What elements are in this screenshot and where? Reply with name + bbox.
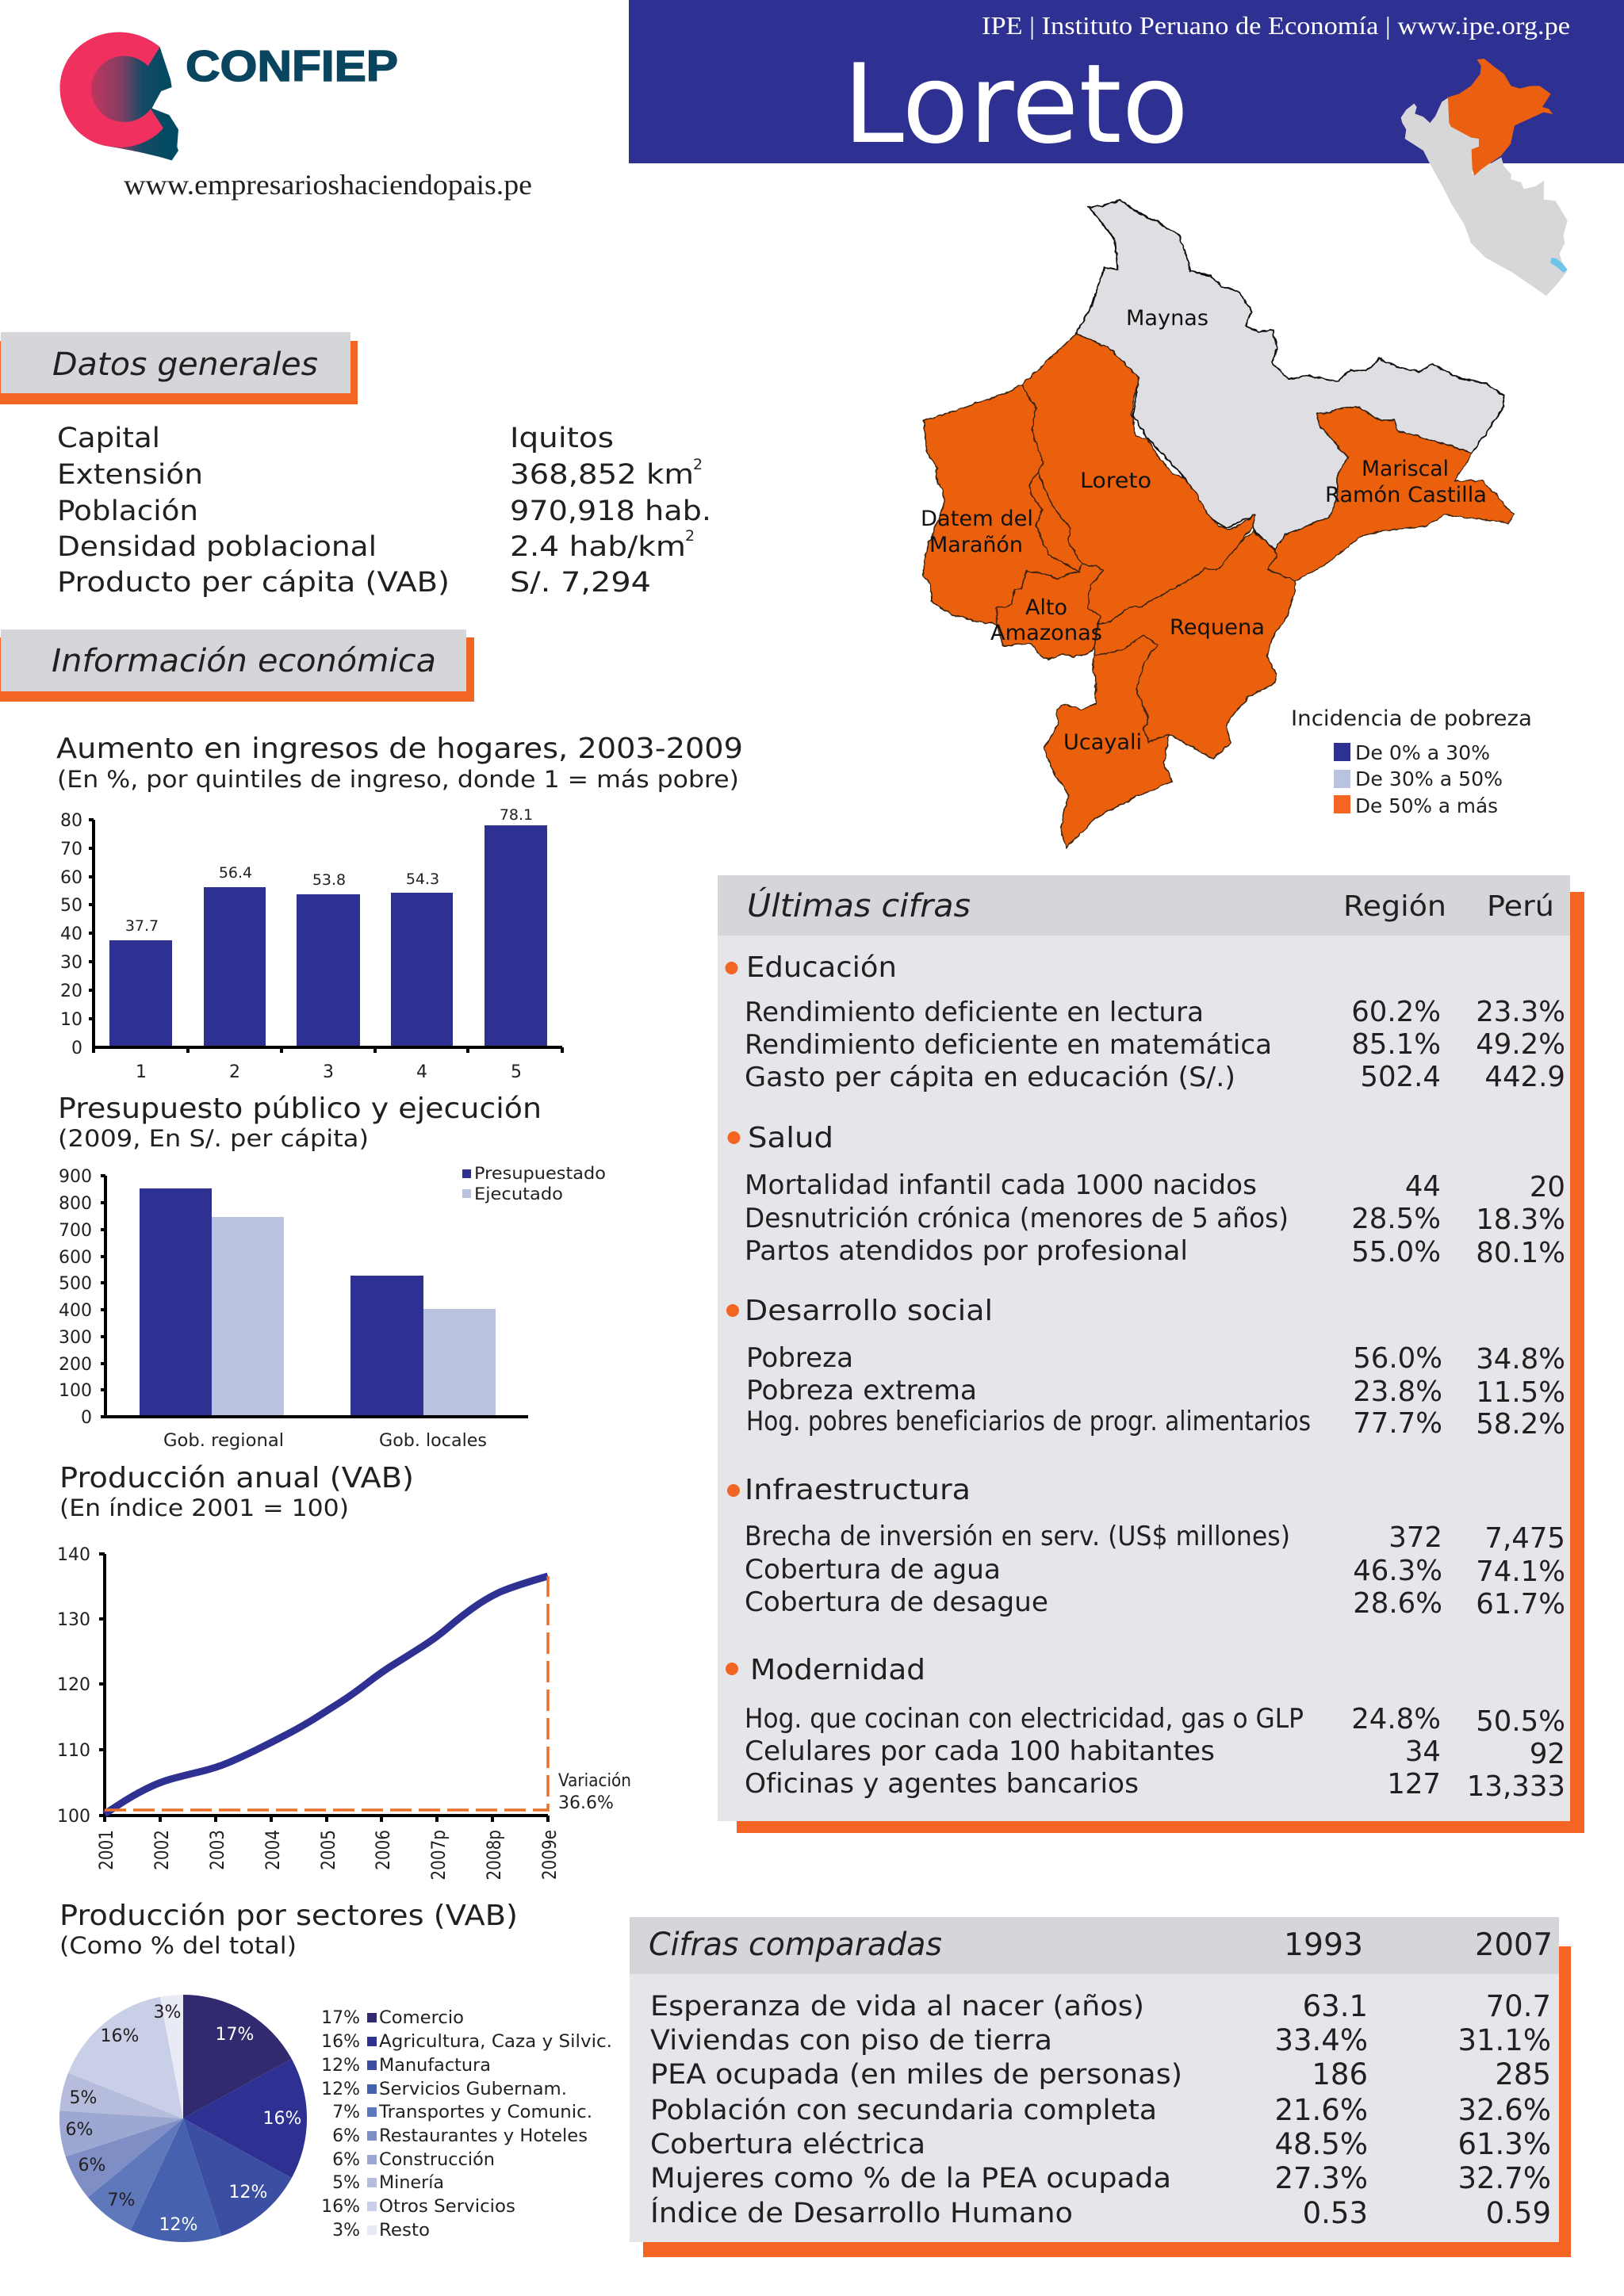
pie chart legend: Agricultura, Caza y Silvic. [379, 2032, 612, 2052]
section: Modernidad: Hog. que cocinan con electricidad, gas o GLP [745, 1703, 1304, 1735]
section: Infraestructura: 46.3% [1353, 1555, 1442, 1587]
section: Educación: Educación [746, 951, 897, 984]
section: Salud: Desnutrición crónica (menores de 5 años) [745, 1203, 1289, 1234]
section: Modernidad [726, 1654, 1565, 1803]
bar chart: ingresos por quintil [60, 806, 562, 1082]
y axis labels [57, 1545, 90, 1827]
panel: Datos generales table: 970,918 hab. [510, 496, 711, 527]
y axis labels: 500 [59, 1274, 92, 1294]
comparison rows: 63.1 [1303, 1989, 1368, 2023]
x axis labels: 3 [323, 1062, 334, 1082]
y axis labels [60, 811, 82, 1058]
pie chart legend: Transportes y Comunic. [378, 2103, 592, 2122]
section: Educación: 85.1% [1351, 1028, 1441, 1061]
section: Infraestructura: Cobertura de desague [745, 1586, 1048, 1618]
panel header [630, 1917, 1559, 1974]
pie chart legend: Restaurantes y Hoteles [379, 2126, 588, 2146]
comparison rows: 21.6% [1274, 2093, 1368, 2127]
x axis labels: 2002 [151, 1830, 174, 1870]
bar chart: presupuesto y ejecución [59, 1164, 606, 1451]
pie slice labels: 12% [229, 2183, 267, 2202]
logo wordmark: CONFIEP [186, 41, 398, 90]
section: Desarrollo social: 23.8% [1353, 1376, 1442, 1408]
map label: Alto Amazonas [990, 595, 1102, 645]
province: Loreto [1022, 334, 1256, 625]
province: Alto Amazonas [997, 564, 1103, 660]
pie chart legend: 17% [321, 2008, 360, 2028]
comparison rows: 61.3% [1457, 2127, 1551, 2161]
chart heading: Aumento en ingresos: Aumento en ingresos de hogares, 2003-2009 [56, 733, 743, 765]
y axis labels: 20 [60, 982, 82, 1001]
pie chart legend: 16% [321, 2197, 360, 2217]
chart heading: Producción por sectores: (Como % del total) [59, 1932, 297, 1959]
section: Salud: Mortalidad infantil cada 1000 nacidos [745, 1169, 1257, 1201]
pie chart legend: 3% [332, 2221, 360, 2241]
bar values: 54.3 [406, 871, 439, 888]
x axis labels: 2009e [538, 1830, 561, 1880]
y axis labels: 400 [59, 1301, 92, 1321]
map label: Datem del Marañón [921, 507, 1033, 557]
province: Ucayali [1044, 637, 1172, 848]
x axis labels: 2007p [427, 1830, 450, 1881]
y axis labels: 60 [60, 868, 82, 888]
section: Educación: 49.2% [1476, 1028, 1565, 1061]
chart heading: Presupuesto público: (2009, En S/. per cápita) [58, 1125, 369, 1152]
section: Desarrollo social: 56.0% [1353, 1342, 1442, 1375]
variation dashed guide [105, 1576, 548, 1810]
section: Salud: Salud [748, 1122, 833, 1154]
province: Maynas [1076, 201, 1504, 549]
comparison rows: 48.5% [1274, 2127, 1368, 2161]
y axis labels: 30 [60, 953, 82, 973]
section: Infraestructura: 61.7% [1476, 1588, 1565, 1621]
map legend [1291, 706, 1532, 817]
bar values: 53.8 [312, 871, 346, 889]
header source line: IPE | Instituto Peruano de Economía | www.ipe.org.pe [982, 11, 1570, 40]
map label: Datem del Marañón: Datem del [921, 507, 1033, 531]
map label: Alto Amazonas: Amazonas [990, 621, 1102, 645]
chart heading: Aumento en ingresos [56, 733, 743, 793]
pie slice labels [66, 2003, 301, 2235]
section: Desarrollo social: 34.8% [1476, 1343, 1565, 1376]
section: Educación: 502.4 [1360, 1061, 1441, 1093]
y axis labels: 40 [60, 924, 82, 944]
map legend: De 30% a 50% [1355, 767, 1503, 790]
pie chart legend: 6% [332, 2150, 360, 2170]
section: Salud: 20 [1530, 1171, 1565, 1203]
pie slice labels: 17% [216, 2025, 254, 2045]
pie slice labels: 3% [154, 2003, 181, 2022]
section: Infraestructura: Cobertura de agua [745, 1554, 1001, 1586]
map label: Loreto: Loreto [1080, 469, 1151, 493]
comparison rows: Cobertura eléctrica [650, 2129, 925, 2160]
pie chart legend: 7% [332, 2103, 360, 2122]
panel: Cifras comparadas [630, 1917, 1571, 2257]
x axis labels: 2006 [372, 1830, 395, 1870]
panel header: Perú [1487, 890, 1554, 923]
section: Desarrollo social: Desarrollo social [745, 1295, 993, 1327]
y axis labels: 70 [60, 840, 82, 859]
pie chart legend: Comercio [379, 2008, 464, 2028]
chart legend: Presupuestado [474, 1164, 606, 1183]
chart heading: Producción por sectores: Producción por sectores (VAB) [59, 1900, 518, 1932]
pie slice labels: 12% [159, 2215, 197, 2235]
chart heading: Producción anual [59, 1462, 414, 1521]
map label: Datem del Marañón: Marañón [929, 533, 1023, 557]
section: Desarrollo social: Pobreza [746, 1342, 853, 1374]
chart heading: Producción anual: (En índice 2001 = 100) [59, 1494, 349, 1521]
comparison rows: 31.1% [1457, 2023, 1551, 2057]
section: Salud: Partos atendidos por profesional [745, 1235, 1188, 1267]
panel header [718, 875, 1570, 936]
y axis labels: 0 [81, 1408, 92, 1428]
section: Educación: Rendimiento deficiente en matemática [745, 1029, 1272, 1061]
y axis labels [59, 1167, 92, 1428]
y axis labels: 0 [71, 1039, 82, 1058]
section: Salud: 28.5% [1351, 1203, 1441, 1235]
pie chart legend: Minería [379, 2173, 444, 2193]
section: Educación: 23.3% [1476, 996, 1565, 1028]
section: Infraestructura: Brecha de inversión en serv. (US$ millones) [745, 1521, 1290, 1552]
section: Salud [728, 1122, 1565, 1269]
y axis labels: 50 [60, 896, 82, 916]
panel: Datos generales table: 2 [685, 527, 695, 545]
comparison rows: 27.3% [1274, 2161, 1368, 2195]
section: Educación: 60.2% [1351, 996, 1441, 1028]
section: Desarrollo social: 77.7% [1353, 1407, 1442, 1440]
panel header: 1993 [1284, 1927, 1363, 1963]
panel header: Cifras comparadas [649, 1927, 942, 1963]
section: Modernidad: Oficinas y agentes bancarios [745, 1768, 1139, 1800]
y axis labels: 130 [57, 1610, 90, 1630]
panel: Datos generales table: Producto per cápita (VAB) [57, 567, 450, 599]
comparison rows: PEA ocupada (en miles de personas) [650, 2059, 1182, 2091]
variation callout: Variación [558, 1771, 631, 1791]
pie chart: producción por sectores [59, 1995, 307, 2242]
section: Infraestructura: 74.1% [1476, 1556, 1565, 1588]
y axis labels: 700 [59, 1221, 92, 1241]
comparison rows: 0.59 [1486, 2196, 1551, 2230]
chart legend: Ejecutado [474, 1184, 563, 1203]
section: Educación: 442.9 [1484, 1061, 1565, 1093]
section: Modernidad: 92 [1530, 1738, 1565, 1770]
pie slice labels: 16% [101, 2026, 139, 2046]
data line [105, 1576, 548, 1814]
province: wedge of Loreto [1030, 472, 1082, 572]
panel: Datos generales table: 2.4 hab/km [510, 531, 686, 563]
panel: Datos generales heading: Datos generales [52, 346, 318, 383]
panel: Datos generales table: 368,852 km [510, 459, 694, 491]
map label: Maynas: Maynas [1126, 306, 1208, 331]
y axis labels: 100 [57, 1807, 90, 1827]
bar values: 37.7 [125, 917, 159, 935]
panel: Datos generales table: S/. 7,294 [510, 567, 651, 599]
chart heading: Aumento en ingresos: (En %, por quintiles de ingreso, donde 1 = más pobre) [57, 766, 739, 793]
map label: Mariscal Ramón Castilla: Ramón Castilla [1325, 483, 1487, 507]
section: Modernidad: 24.8% [1351, 1703, 1441, 1735]
variation callout [558, 1771, 631, 1813]
section: Modernidad: 127 [1387, 1768, 1441, 1800]
y axis labels: 900 [59, 1167, 92, 1187]
comparison rows: Esperanza de vida al nacer (años) [650, 1991, 1144, 2022]
section: Infraestructura: 372 [1388, 1521, 1442, 1554]
pie chart legend: 6% [332, 2126, 360, 2146]
comparison rows: 32.7% [1457, 2161, 1551, 2195]
y axis labels: 110 [57, 1741, 90, 1761]
chart heading: Producción anual: Producción anual (VAB) [59, 1462, 414, 1494]
panel: Datos generales table: Iquitos [510, 423, 614, 454]
map label: Alto Amazonas: Alto [1025, 595, 1067, 620]
pie chart legend: Servicios Gubernam. [379, 2080, 567, 2099]
x axis labels: 5 [511, 1062, 522, 1082]
line chart: producción anual [57, 1545, 631, 1881]
x axis labels: 2004 [262, 1830, 285, 1870]
y axis labels: 300 [59, 1328, 92, 1348]
pie chart legend: Manufactura [379, 2056, 491, 2076]
section: Modernidad: 34 [1405, 1735, 1441, 1768]
section: Salud: 18.3% [1476, 1203, 1565, 1236]
comparison rows: 186 [1312, 2057, 1368, 2091]
comparison rows: 33.4% [1274, 2023, 1368, 2057]
panel: Información económica heading: Información económica [52, 643, 436, 679]
y axis labels: 10 [60, 1010, 82, 1030]
bar values [125, 806, 533, 935]
pie slice labels: 6% [66, 2120, 93, 2140]
map: poverty incidence by province [921, 201, 1532, 848]
comparison rows: Índice de Desarrollo Humano [650, 2196, 1073, 2229]
chart legend [462, 1164, 606, 1203]
chart heading: Presupuesto público [58, 1093, 542, 1152]
locator map: Peru [1401, 59, 1568, 296]
chart heading: Producción por sectores [59, 1900, 518, 1959]
variation callout: 36.6% [558, 1793, 614, 1813]
x axis labels: 1 [136, 1062, 147, 1082]
comparison rows: 285 [1495, 2057, 1551, 2091]
x axis labels [163, 1431, 487, 1451]
section: Educación: Gasto per cápita en educación (S/.) [745, 1062, 1235, 1093]
section: Educación [725, 951, 1565, 1093]
comparison rows: 70.7 [1486, 1989, 1551, 2023]
section: Desarrollo social: 58.2% [1476, 1408, 1565, 1441]
comparison rows: Mujeres como % de la PEA ocupada [650, 2163, 1171, 2195]
header band [629, 0, 1624, 168]
section: Desarrollo social: Pobreza extrema [746, 1375, 977, 1406]
pie slice labels: 16% [263, 2109, 301, 2129]
section: Modernidad: Celulares por cada 100 habitantes [745, 1735, 1215, 1767]
section: Salud: 80.1% [1476, 1237, 1565, 1269]
x axis labels: 2003 [206, 1830, 229, 1870]
pie slice labels: 5% [70, 2088, 97, 2108]
section: Modernidad: 50.5% [1476, 1705, 1565, 1738]
panel: Datos generales table: 2 [693, 456, 703, 473]
comparison rows: Viviendas con piso de tierra [650, 2025, 1052, 2057]
map legend: De 0% a 30% [1355, 741, 1490, 764]
x axis labels: 2 [229, 1062, 240, 1082]
x axis labels [95, 1830, 561, 1881]
x axis labels: 2001 [95, 1830, 118, 1870]
pie chart legend [321, 2008, 612, 2241]
comparison rows [650, 1989, 1551, 2230]
section: Infraestructura [727, 1474, 1565, 1621]
pie chart legend: Resto [379, 2221, 430, 2241]
y axis labels: 200 [59, 1355, 92, 1375]
panel header: Últimas cifras [747, 886, 971, 924]
x axis labels: 4 [416, 1062, 427, 1082]
x axis labels [136, 1062, 522, 1082]
y axis labels: 800 [59, 1194, 92, 1214]
section: Educación: Rendimiento deficiente en lectura [745, 997, 1204, 1028]
pie chart legend: 5% [332, 2173, 360, 2193]
pie chart legend: 12% [321, 2080, 360, 2099]
title: Loreto [843, 40, 1189, 168]
comparison rows: 0.53 [1303, 2196, 1368, 2230]
logo: CONFIEP [60, 33, 398, 160]
section: Infraestructura: Infraestructura [745, 1474, 971, 1506]
panel: Datos generales table: Densidad poblacional [57, 531, 377, 563]
panel: Información económica heading [0, 629, 474, 702]
panel: Datos generales table: Extensión [57, 459, 203, 491]
section: Infraestructura: 7,475 [1484, 1522, 1565, 1555]
section: Modernidad: 13,333 [1467, 1770, 1565, 1803]
section: Desarrollo social [726, 1295, 1565, 1441]
chart heading: Presupuesto público: Presupuesto público y ejecución [58, 1093, 542, 1125]
pie chart legend: Otros Servicios [379, 2197, 515, 2217]
panel: Datos generales heading [0, 332, 358, 404]
section: Desarrollo social: 11.5% [1476, 1376, 1565, 1409]
map label: Requena: Requena [1170, 615, 1265, 640]
bar values: 78.1 [500, 806, 533, 824]
y axis labels: 100 [59, 1381, 92, 1401]
x axis labels: 2005 [317, 1830, 340, 1870]
pie slice labels: 6% [79, 2156, 105, 2175]
y axis labels: 80 [60, 811, 82, 831]
panel header: Región [1343, 890, 1446, 923]
pie chart legend: 12% [321, 2056, 360, 2076]
comparison rows: 32.6% [1457, 2093, 1551, 2127]
icon: CONFIEP C mark [60, 33, 178, 160]
section: Salud: 44 [1405, 1170, 1441, 1203]
panel: Datos generales table: Población [57, 496, 198, 527]
y axis labels: 120 [57, 1675, 90, 1695]
comparison rows: Población con secundaria completa [650, 2095, 1157, 2126]
x axis labels: Gob. regional [163, 1431, 284, 1451]
bar values: 56.4 [219, 864, 252, 882]
y axis labels: 600 [59, 1248, 92, 1268]
section: Salud: 55.0% [1351, 1236, 1441, 1269]
pie chart legend: Construcción [379, 2150, 495, 2170]
x axis labels: Gob. locales [379, 1431, 487, 1451]
province: Requena [1094, 531, 1295, 760]
map label: Mariscal Ramón Castilla: Mariscal [1362, 457, 1449, 481]
x axis labels: 2008p [483, 1830, 506, 1881]
map legend: De 50% a más [1355, 794, 1498, 817]
website link: www.empresarioshaciendopais.pe [124, 169, 532, 201]
province: Mariscal Ramón Castilla [1267, 406, 1514, 581]
map label: Mariscal Ramón Castilla [1325, 457, 1487, 507]
panel: Datos generales table: Capital [57, 423, 160, 454]
pie slice labels: 7% [108, 2191, 135, 2210]
y axis labels: 140 [57, 1545, 90, 1565]
section: Desarrollo social: Hog. pobres beneficiarios de progr. alimentarios [746, 1406, 1311, 1437]
panel: Últimas cifras [718, 875, 1584, 1833]
pie chart legend: 16% [321, 2032, 360, 2052]
map label: Ucayali: Ucayali [1063, 730, 1142, 755]
panel header: 2007 [1475, 1927, 1553, 1963]
section: Infraestructura: 28.6% [1353, 1587, 1442, 1620]
province: Datem del Marañón [923, 385, 1078, 624]
panel: Datos generales table [57, 423, 711, 599]
section: Modernidad: Modernidad [750, 1654, 925, 1686]
legend title: Incidencia de pobreza [1291, 706, 1532, 731]
